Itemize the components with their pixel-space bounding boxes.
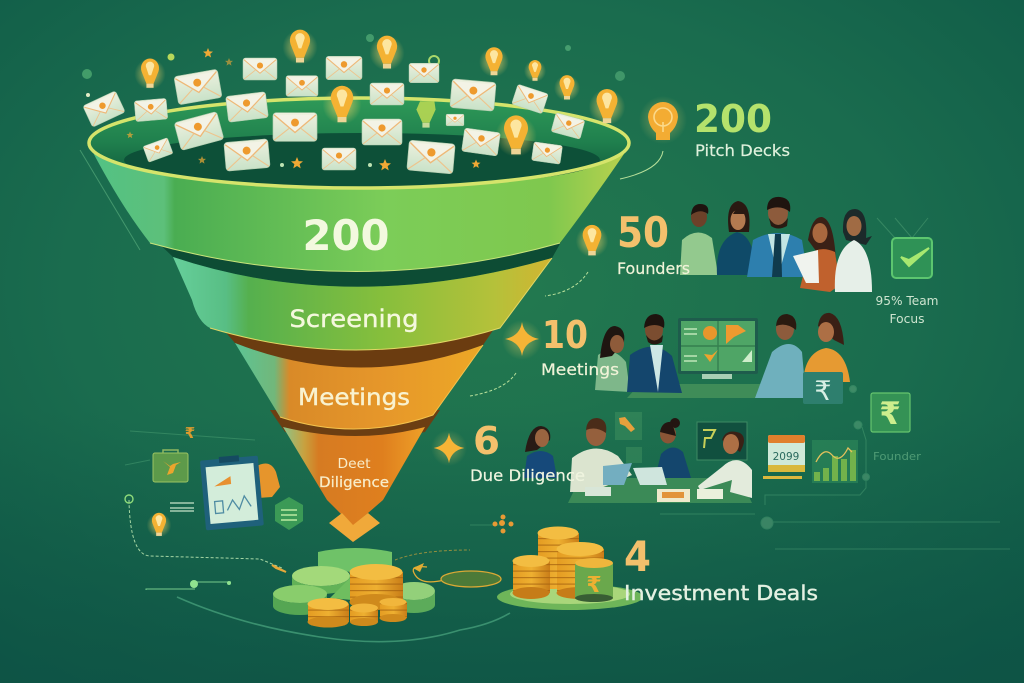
stat: 6 due diligence <box>431 419 585 485</box>
faded founder label: Founder <box>873 450 922 463</box>
illustration: due diligence scene <box>524 412 752 503</box>
stage 1 count: 200 <box>302 211 390 260</box>
label: Due Diligence <box>470 466 585 485</box>
founder 1 <box>680 204 718 275</box>
person: man in navy suit <box>627 314 682 393</box>
icon: calendar 2099: 2099 <box>773 451 799 463</box>
founder 3 <box>747 197 808 277</box>
laptops and papers <box>585 463 723 502</box>
icon: small lightbulb <box>576 225 608 257</box>
meeting table <box>627 384 795 398</box>
faded panels <box>615 412 747 463</box>
icon: clipboard <box>200 454 264 530</box>
stage 3 label: Meetings <box>298 385 410 411</box>
table <box>568 478 752 503</box>
founder 5 <box>835 209 872 292</box>
icon: sparkle <box>431 430 467 466</box>
stage 4 label line 2: Diligence <box>319 475 389 491</box>
team focus label <box>876 293 938 326</box>
icon: sparkle <box>502 320 542 360</box>
stat: 4 investment deals <box>497 526 818 610</box>
arrow: coin flow <box>395 514 514 587</box>
funnel interior <box>90 98 628 188</box>
label: Pitch Decks <box>695 141 790 160</box>
label: Founders <box>617 259 690 278</box>
funnel stage 1: top band <box>88 98 630 272</box>
funnel <box>80 98 630 542</box>
funnel stage 3: meetings band <box>215 320 500 429</box>
illustration: meeting scene <box>595 313 850 407</box>
number: 4 <box>624 532 651 581</box>
person: woman in dark suit <box>655 418 691 478</box>
coin stack lower left <box>308 598 349 628</box>
person: woman in orange <box>803 313 850 382</box>
green stack left <box>273 585 327 615</box>
envelopes and idea bulbs <box>82 29 625 174</box>
money and coin pile <box>273 548 435 628</box>
icon: big lightbulb <box>620 96 687 179</box>
coin stack lower mid <box>350 604 378 626</box>
icon: rupee badge: ₹ <box>879 396 901 432</box>
green stack top <box>318 548 392 572</box>
stage 2 label: Screening <box>290 305 418 333</box>
number: 200 <box>694 97 772 141</box>
dashed arrow <box>125 495 286 572</box>
node <box>146 580 231 590</box>
connector <box>470 373 516 396</box>
funnel stage 4: due diligence cone <box>270 410 440 542</box>
founder 4 <box>793 217 840 292</box>
icon: green hexagon <box>275 497 303 530</box>
coin stack tall <box>350 564 403 610</box>
person: man in light shirt <box>570 418 632 492</box>
lines <box>170 503 194 511</box>
number: 50 <box>617 208 669 257</box>
stat: 10 meetings <box>470 313 619 396</box>
funnel shadow stroke <box>80 150 140 250</box>
funnel stage 2: screening band <box>150 235 565 350</box>
coin stack lower right <box>380 598 407 622</box>
monitor <box>678 318 758 379</box>
stat: 50 founders <box>545 208 690 296</box>
illustration: founders group <box>680 197 872 292</box>
connector <box>545 272 588 296</box>
rupee box <box>803 372 843 407</box>
stat: 200 pitch decks <box>620 96 790 179</box>
sparkles <box>82 34 625 170</box>
founder 2 <box>717 201 756 275</box>
icon: head badge <box>255 463 280 498</box>
icon: growth chart <box>812 440 858 483</box>
circuit lines decoration <box>125 386 1010 549</box>
label: Meetings <box>541 360 619 379</box>
icon: rupee badge <box>871 393 910 432</box>
icon: rupee glyph: ₹ <box>185 424 195 442</box>
person: woman in navy <box>524 426 557 478</box>
icon: small bulb <box>147 513 171 537</box>
person: woman in white <box>698 432 752 498</box>
coin pile and platform <box>497 526 643 610</box>
person: woman left <box>595 326 630 392</box>
gold ellipse <box>441 571 501 587</box>
label: Investment Deals <box>624 581 818 605</box>
left cluster of due diligence icons <box>125 424 303 590</box>
sweep curve <box>177 597 510 642</box>
icon: team focus checkbox <box>877 218 932 278</box>
green stack right <box>393 582 435 613</box>
number: 10 <box>542 313 588 357</box>
green stack mid <box>292 566 350 594</box>
person: man in blue shirt <box>755 314 806 398</box>
team focus label: 95% Team <box>876 293 938 308</box>
icon: briefcase <box>153 450 188 482</box>
icon: calendar 2099 <box>763 435 805 479</box>
stage 4 arrow <box>329 513 380 542</box>
coin pile and platform: ₹ <box>586 573 602 598</box>
rupee box: ₹ <box>814 376 832 407</box>
stage 4 label: Deet <box>338 457 370 472</box>
number: 6 <box>473 419 500 463</box>
team focus label: Focus <box>890 311 924 326</box>
